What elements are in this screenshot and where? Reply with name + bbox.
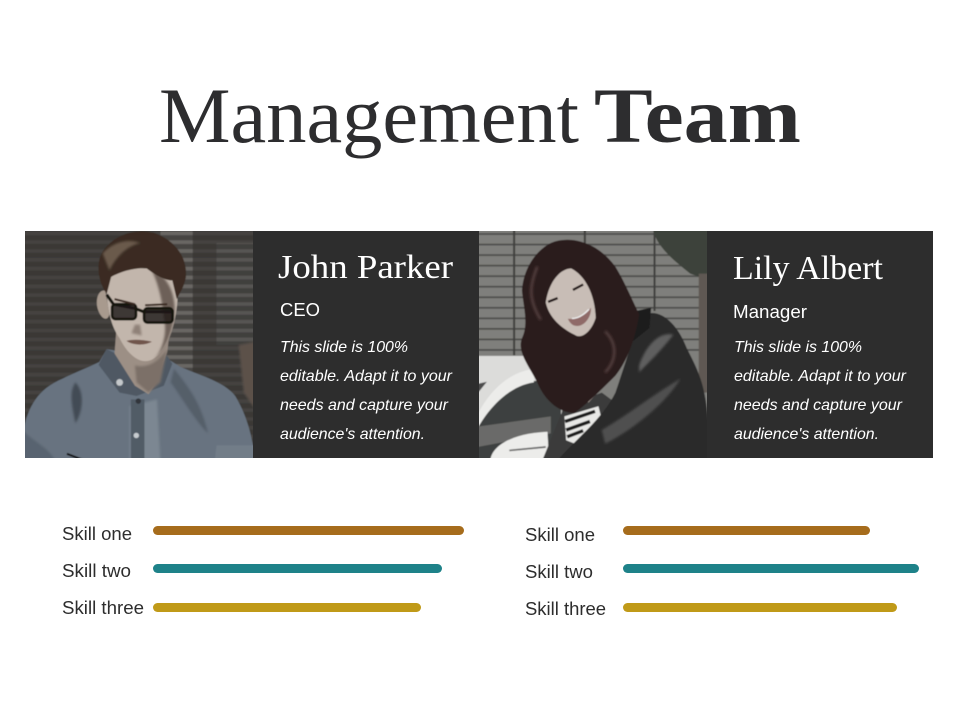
photo: John Parker: [25, 231, 253, 458]
title: Team: [594, 72, 801, 159]
photo: Lily Albert: [479, 231, 707, 458]
skill labels: Skill three: [525, 599, 606, 619]
bar: skill three: [153, 603, 421, 612]
bar: skill two: [153, 564, 442, 573]
panel background: John Parker: [253, 231, 479, 458]
skills chart: John Parker: [62, 524, 464, 618]
role: CEO: CEO: [280, 300, 320, 320]
title: Management: [159, 72, 579, 159]
description: Lily Albert: needs and capture your: [734, 397, 903, 414]
panel: John Parker: [23, 229, 479, 460]
description: John Parker: [280, 339, 453, 443]
name: Lily Albert: Lily Albert: [733, 250, 884, 287]
description: Lily Albert: [734, 339, 907, 443]
skill labels: Skill two: [62, 561, 131, 581]
name: John Parker: John Parker: [278, 249, 454, 286]
description: Lily Albert: This slide is 100%: [734, 339, 862, 356]
description: Lily Albert: audience's attention.: [734, 426, 879, 443]
description: Lily Albert: editable. Adapt it to your: [734, 368, 907, 385]
bar: skill one: [623, 526, 870, 535]
description: John Parker: editable. Adapt it to your: [280, 368, 453, 385]
bar: skill two: [623, 564, 919, 573]
skill labels: Skill three: [62, 598, 144, 618]
role: Manager: Manager: [733, 302, 807, 322]
description: John Parker: audience's attention.: [280, 426, 425, 443]
description: John Parker: This slide is 100%: [280, 339, 408, 356]
skill labels: [525, 525, 606, 619]
skills chart: Lily Albert: [525, 525, 919, 619]
panel: Lily Albert: [477, 229, 933, 460]
bar: skill one: [153, 526, 464, 535]
description: John Parker: needs and capture your: [280, 397, 449, 414]
skill labels: [62, 524, 144, 618]
bar: skill three: [623, 603, 897, 612]
skill labels: Skill one: [525, 525, 595, 545]
skill labels: Skill two: [525, 562, 593, 582]
panel background: Lily Albert: [707, 231, 933, 458]
skill labels: Skill one: [62, 524, 132, 544]
title: [159, 72, 801, 159]
